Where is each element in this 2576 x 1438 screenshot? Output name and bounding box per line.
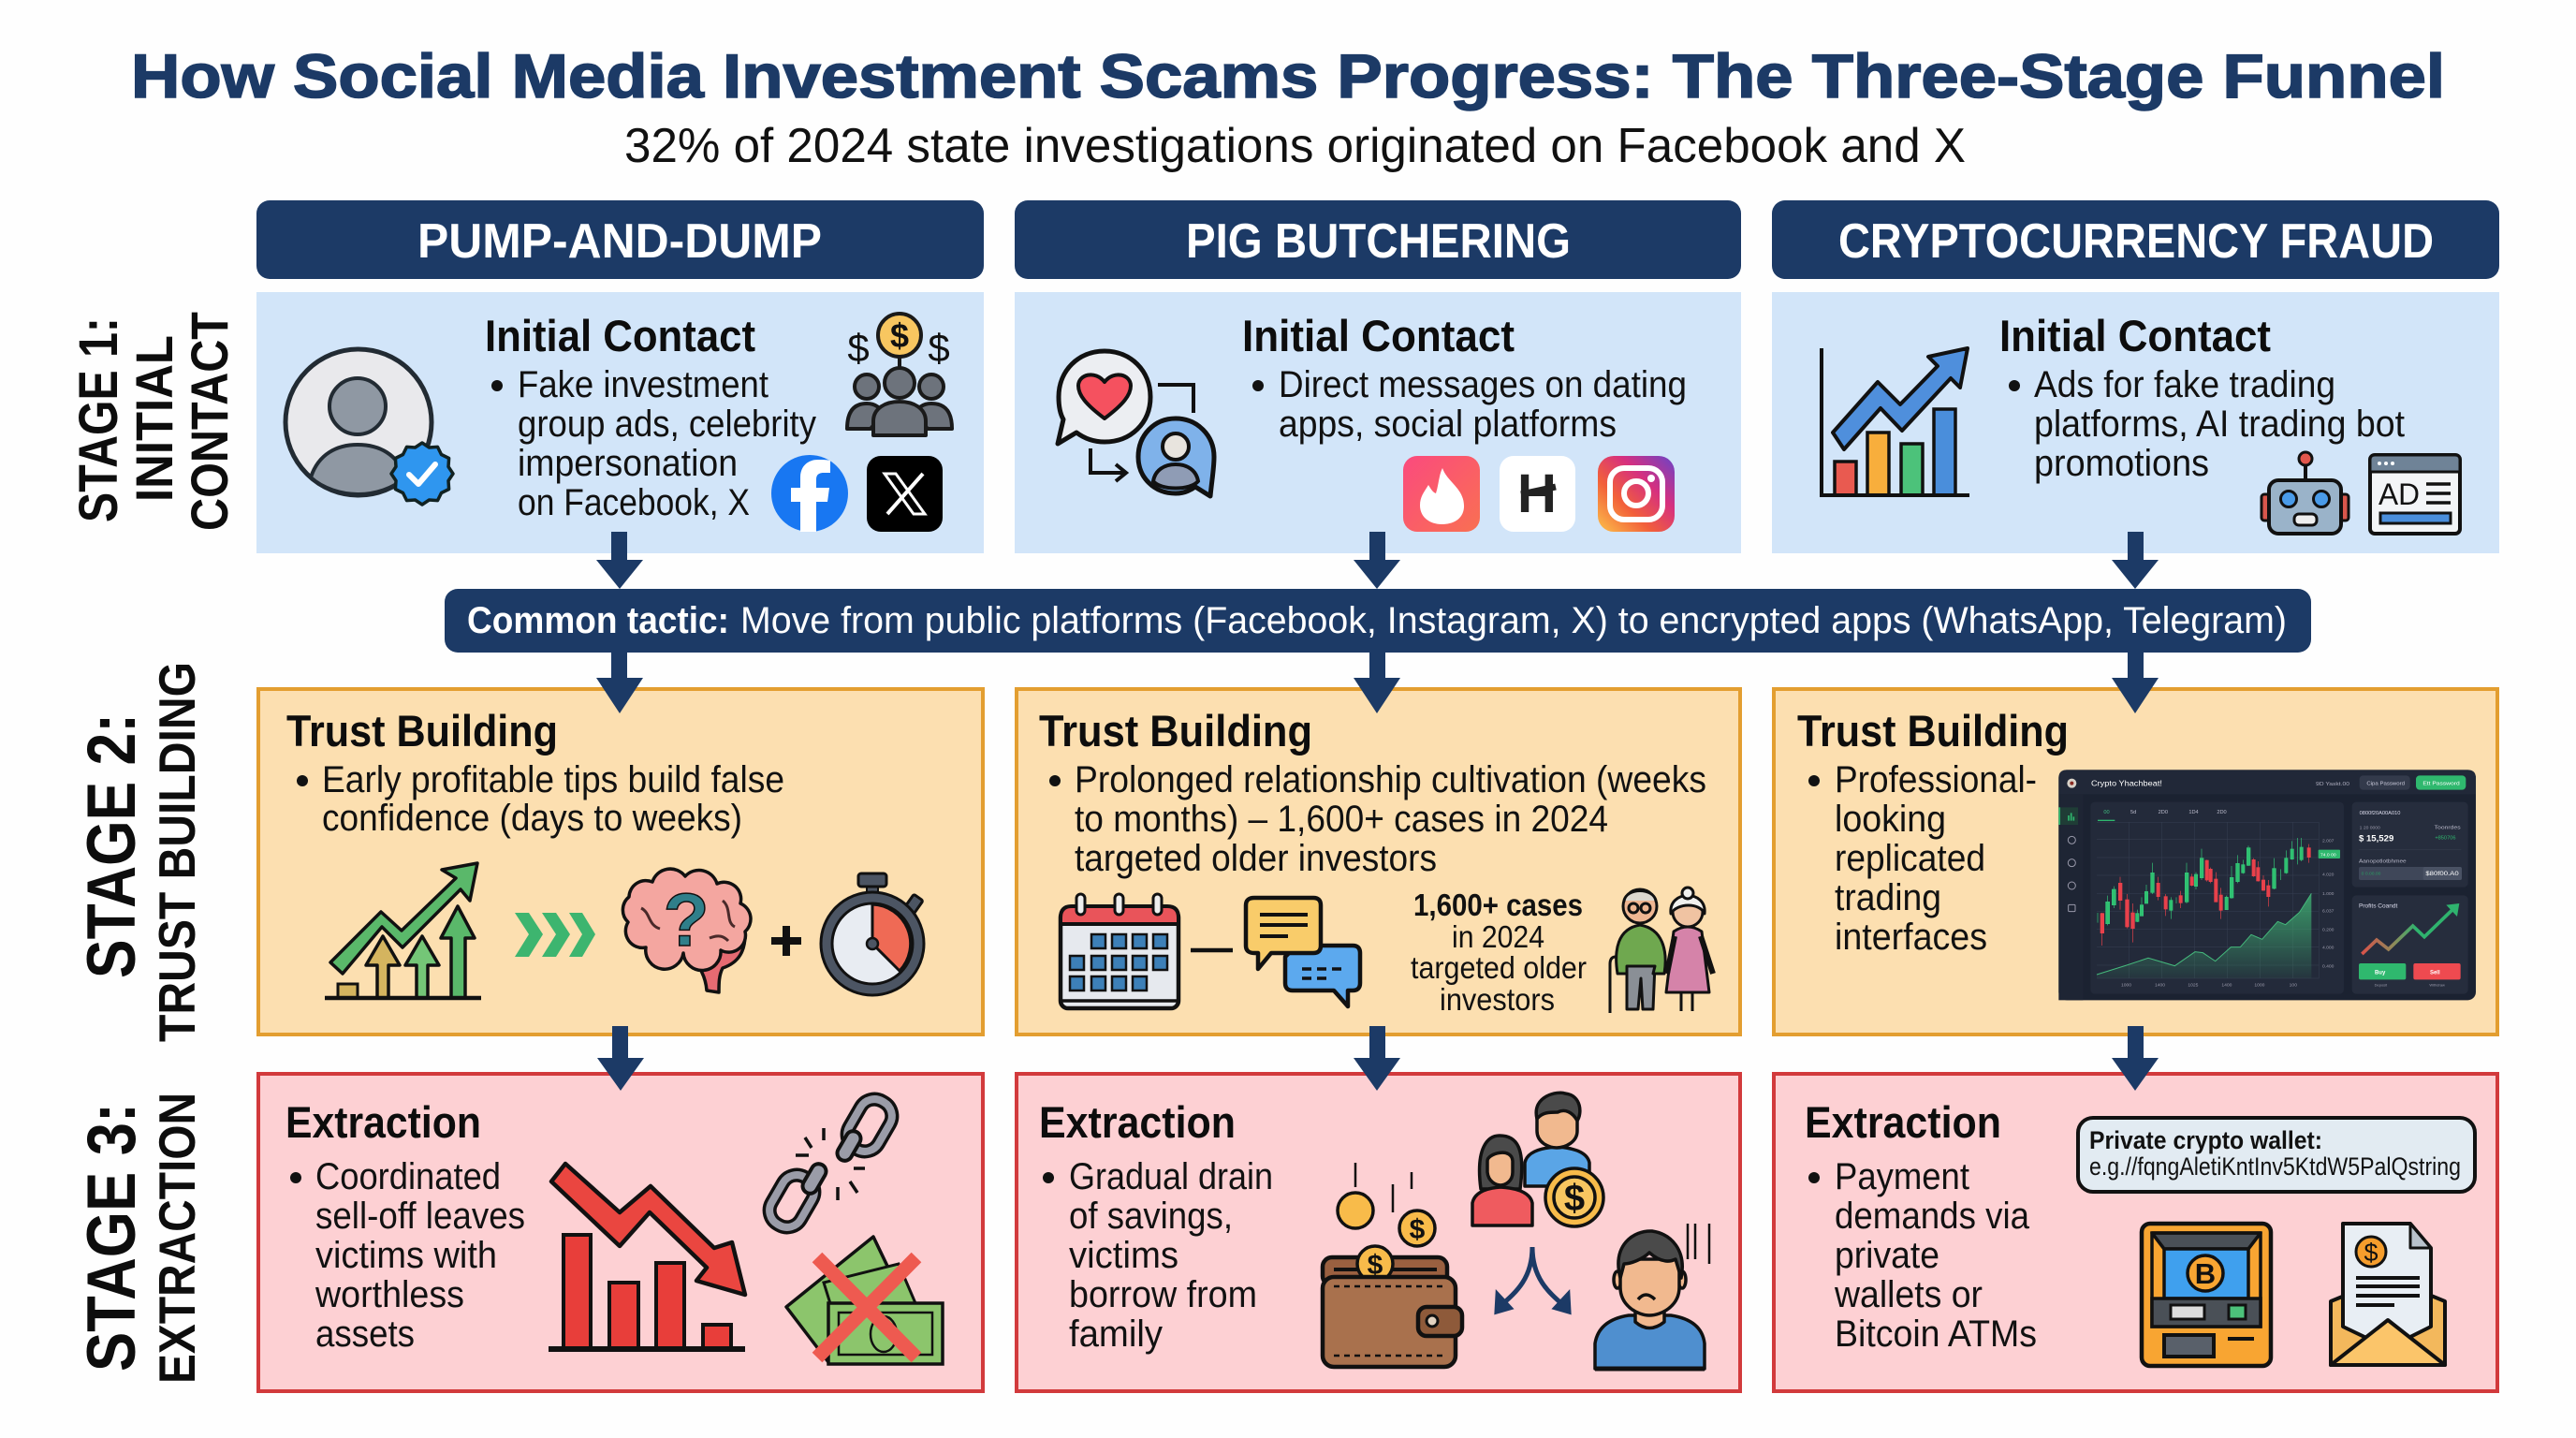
panel: initial contact, pump-and-dump: Initial Contact: [485, 311, 755, 360]
stat text: 1,600+ cases: in 2024: [1452, 919, 1544, 954]
arrow: tactic to stage 2, pump-and-dump: [596, 646, 643, 713]
bullet text: Gradual drain: [1069, 1156, 1273, 1197]
stat text: 1,600+ cases: 1,600+ cases: [1413, 888, 1583, 922]
trading dashboard mockup: 1 20 0000: [2360, 825, 2380, 830]
stage 1 label: [68, 312, 239, 531]
arrow: stage 2 to stage 3, pig butchering: [1354, 1026, 1400, 1091]
trading dashboard mockup: 2D0: [2217, 810, 2227, 815]
panel: extraction, pump-and-dump: Extraction: [285, 1097, 481, 1147]
trading dashboard mockup: 100: [2290, 983, 2297, 989]
callout: private crypto wallet: e.g.//fqngAletiKntInv5KtdW5PalQstring: [2089, 1152, 2461, 1181]
icon: green chevrons: [515, 913, 595, 957]
trading dashboard mockup: 1400: [2155, 983, 2165, 989]
bullet text: Bitcoin ATMs: [1835, 1313, 2037, 1355]
trading dashboard mockup: 00: [2103, 810, 2110, 815]
icon: hinge app: [1500, 456, 1575, 532]
bullet text: [297, 759, 784, 839]
trading dashboard mockup: 0.200: [2322, 927, 2334, 932]
column header: cryptocurrency fraud: [1772, 200, 2499, 279]
icon: bitcoin ATM: [2142, 1224, 2271, 1366]
title: How Social Media Investment Scams Progress: The Three-Stage Funnel: [131, 41, 2445, 110]
bullet text: targeted older investors: [1075, 838, 1437, 879]
trading dashboard mockup: 6.037: [2322, 908, 2334, 914]
column header: cryptocurrency fraud: CRYPTOCURRENCY FRAUD: [1838, 214, 2434, 269]
icon: facebook logo: [771, 455, 848, 532]
common tactic banner: Common tactic:: [467, 600, 729, 641]
icon: X logo: [867, 456, 943, 532]
trading dashboard mockup: 5d: [2130, 810, 2136, 815]
subtitle: 32% of 2024 state investigations originated on Facebook and X: [624, 119, 1966, 173]
panel: trust building, pig butchering: Trust Building: [1039, 706, 1312, 756]
trading dashboard mockup: Sell: [2430, 970, 2440, 976]
bullet text: impersonation: [518, 443, 738, 484]
arrow: stage 1 to tactic, crypto fraud: [2112, 532, 2159, 589]
arrow: tactic to stage 2, crypto fraud: [2112, 646, 2159, 713]
trading dashboard mockup: Ett Password: [2422, 781, 2460, 786]
bullet text: [1252, 364, 1687, 445]
trading dashboard mockup: 0 0.00.00: [2362, 871, 2381, 876]
bullet text: wallets or: [1834, 1274, 1983, 1315]
trading dashboard mockup: Cipa Password: [2366, 781, 2405, 786]
icon: ad window: [2370, 455, 2460, 534]
arrow: stage 1 to tactic, pump-and-dump: [596, 532, 643, 589]
bullet text: victims with: [315, 1235, 497, 1276]
stat text: 1,600+ cases: investors: [1440, 982, 1555, 1017]
bullet text: assets: [315, 1313, 415, 1355]
stage 3 label: [74, 1093, 206, 1384]
bullet text: Direct messages on dating: [1279, 364, 1687, 405]
bullet text: borrow from: [1069, 1274, 1257, 1315]
icon: split arrows: [1497, 1247, 1569, 1312]
icon: worthless money: [786, 1237, 943, 1364]
icon: crashing bar chart: [549, 1164, 745, 1349]
callout: private crypto wallet: [2078, 1118, 2475, 1192]
icon: wallet with falling coins: $: [1368, 1250, 1383, 1281]
trading dashboard mockup: +850706: [2435, 836, 2456, 842]
trading dashboard mockup: 74.0 00: [2320, 852, 2336, 858]
panel: trust building, pump-and-dump: Trust Building: [286, 706, 558, 756]
stat text: 1,600+ cases: targeted older: [1411, 950, 1587, 985]
icon: investment group with coin: [847, 314, 952, 435]
icon: brain with question mark: [622, 869, 751, 992]
bullet text: private: [1835, 1235, 1939, 1276]
icon: chat bubbles: [1246, 898, 1360, 1006]
callout: private crypto wallet: Private crypto wallet:: [2089, 1126, 2322, 1154]
icon: rising gains chart: [325, 863, 481, 998]
trading dashboard mockup: [2058, 770, 2476, 1000]
stage 3 label: EXTRACTION: [148, 1093, 206, 1384]
bullet text: Early profitable tips build false: [322, 759, 784, 800]
trading dashboard mockup: 1000: [2121, 983, 2131, 989]
trading dashboard mockup: Crypto Yhachbeat!: [2091, 779, 2162, 788]
bullet text: worthless: [315, 1274, 464, 1315]
icon: fake verified profile: [285, 349, 453, 505]
trading dashboard mockup: Aanopotlotbhmee: [2359, 859, 2407, 865]
trading dashboard mockup: 2D0: [2159, 810, 2168, 815]
icon: rising bar chart: [1822, 348, 1969, 495]
column header: pump-and-dump: PUMP-AND-DUMP: [417, 214, 822, 269]
stage 3 label: STAGE 3:: [74, 1103, 150, 1372]
bullet text: to months) – 1,600+ cases in 2024: [1075, 799, 1608, 840]
stage 2 label: [74, 662, 206, 1042]
icon: envelope with demand letter: $: [2364, 1239, 2378, 1267]
icon: wallet with falling coins: $: [1410, 1214, 1426, 1245]
trading dashboard mockup: 1000: [2254, 983, 2265, 989]
arrow: stage 1 to tactic, pig butchering: [1354, 532, 1400, 589]
panel: trust building, pump-and-dump: [258, 689, 983, 1034]
trading dashboard mockup: 1D4: [2188, 810, 2199, 815]
bullet text: trading: [1835, 877, 1941, 918]
bullet text: [1808, 1156, 2037, 1355]
bullet text: Professional-: [1835, 759, 2037, 800]
icon: family members and coin: $: [1564, 1178, 1585, 1219]
icon: family members and coin: [1472, 1093, 1603, 1226]
bullet text: sell-off leaves: [315, 1196, 525, 1237]
panel: extraction, pig butchering: Extraction: [1039, 1097, 1236, 1147]
bullet text: family: [1069, 1313, 1163, 1355]
bullet text: of savings,: [1069, 1196, 1233, 1237]
icon: trading bot: [2261, 452, 2349, 534]
bullet text: on Facebook, X: [518, 482, 750, 523]
bullet text: Payment: [1835, 1156, 1969, 1197]
panel: initial contact, pig butchering: [1015, 292, 1741, 553]
panel: extraction, pig butchering: [1017, 1074, 1740, 1391]
trading dashboard mockup: $ 15,529: [2359, 833, 2393, 843]
bullet text: group ads, celebrity: [518, 404, 816, 445]
trading dashboard mockup: 0800f20A00A010: [2360, 811, 2400, 816]
panel: trust building, pig butchering: [1017, 689, 1740, 1034]
trading dashboard mockup: 1.000: [2322, 891, 2334, 897]
bullet text: [2009, 364, 2405, 484]
icon: hinge app: H: [1517, 463, 1557, 524]
trading dashboard mockup: Buy: [2375, 970, 2386, 976]
bullet text: [491, 364, 816, 523]
icon: calendar: [1061, 894, 1178, 1008]
bullet text: Ads for fake trading: [2034, 364, 2335, 405]
trading dashboard mockup: Withdraw: [2429, 983, 2445, 988]
panel: initial contact, pump-and-dump: [256, 292, 984, 553]
bullet text: Prolonged relationship cultivation (weeks: [1075, 759, 1706, 800]
bullet text: Coordinated: [315, 1156, 501, 1197]
bullet text: interfaces: [1835, 917, 1987, 958]
trading dashboard mockup: 1400: [2221, 983, 2232, 989]
icon: investment group with coin: $: [847, 326, 870, 370]
bullet text: [1049, 759, 1706, 879]
trading dashboard mockup: 1025: [2188, 983, 2199, 989]
icon: brain with question mark: ?: [664, 878, 709, 961]
icon: plus sign: [771, 926, 801, 956]
column header: pump-and-dump: [256, 200, 984, 279]
trading dashboard mockup: Toonrdes: [2435, 826, 2461, 831]
arrow: stage 2 to stage 3, crypto fraud: [2112, 1026, 2159, 1091]
bullet text: replicated: [1835, 838, 1985, 879]
arrow: tactic to stage 2, pig butchering: [1354, 646, 1400, 713]
stage 1 label: CONTACT: [180, 312, 239, 531]
icon: envelope with demand letter: [2331, 1224, 2445, 1365]
stage 2 label: TRUST BUILDING: [148, 662, 206, 1042]
panel: extraction, cryptocurrency fraud: Extraction: [1805, 1097, 2001, 1147]
stage 1 label: STAGE 1:: [68, 317, 129, 522]
bullet text: demands via: [1835, 1196, 2030, 1237]
column header: pig butchering: [1015, 200, 1741, 279]
panel: initial contact, pig butchering: Initial Contact: [1242, 311, 1515, 360]
trading dashboard mockup: 0.400: [2322, 963, 2334, 969]
panel: trust building, cryptocurrency fraud: Trust Building: [1797, 706, 2069, 756]
panel: extraction, cryptocurrency fraud: [1774, 1074, 2497, 1391]
icon: instagram app: [1598, 456, 1675, 532]
bullet text: promotions: [2034, 443, 2209, 484]
icon: investment group with coin: $: [890, 316, 909, 355]
connector dash: [1191, 948, 1233, 952]
trading dashboard mockup: Profits Coandt: [2359, 904, 2398, 910]
icon: investment group with coin: $: [928, 326, 950, 370]
column header: pig butchering: PIG BUTCHERING: [1186, 214, 1571, 269]
bullet text: platforms, AI trading bot: [2034, 404, 2405, 445]
stage 1 label: INITIAL: [124, 335, 183, 502]
panel: initial contact, cryptocurrency fraud: Initial Contact: [1999, 311, 2271, 360]
arrow: stage 2 to stage 3, pump-and-dump: [597, 1026, 644, 1091]
bullet text: looking: [1835, 799, 1946, 840]
trading dashboard mockup: $80f00.A0: [2425, 871, 2459, 877]
icon: bitcoin ATM: B: [2195, 1257, 2216, 1290]
panel: initial contact, cryptocurrency fraud: [1772, 292, 2499, 553]
bullet text: apps, social platforms: [1279, 404, 1617, 445]
bullet text: [290, 1156, 525, 1355]
common tactic banner: [445, 589, 2311, 653]
panel: extraction, pump-and-dump: [258, 1074, 983, 1391]
panel: trust building, cryptocurrency fraud: [1774, 689, 2497, 1034]
common tactic banner: Move from public platforms (Facebook, Instagram, X) to encrypted apps (WhatsApp, Telegram): [740, 600, 2287, 641]
trading dashboard mockup: 2.007: [2322, 839, 2334, 844]
bullet text: [1808, 759, 2037, 958]
stage 2 label: STAGE 2:: [74, 713, 150, 978]
icon: distressed victim: [1595, 1224, 1709, 1369]
bullet text: victims: [1069, 1235, 1178, 1276]
trading dashboard mockup: 4.020: [2322, 873, 2334, 878]
icon: broken chain: [764, 1093, 898, 1233]
stat text: 1,600+ cases: [1411, 888, 1587, 1017]
bullet text: confidence (days to weeks): [322, 798, 742, 839]
bullet text: [1043, 1156, 1273, 1355]
icon: ad window: AD: [2378, 477, 2420, 511]
bullet text: Fake investment: [518, 364, 768, 405]
icon: wallet with falling coins: [1323, 1163, 1462, 1367]
icon: stopwatch: [821, 873, 924, 995]
icon: elderly couple: [1610, 888, 1713, 1013]
trading dashboard mockup: Deposit: [2375, 983, 2388, 988]
icon: tinder app: [1403, 456, 1480, 532]
icon: chat heart and profile bubbles: [1058, 351, 1214, 496]
trading dashboard mockup: 4.000: [2322, 946, 2334, 951]
trading dashboard mockup: 9D Yaskt.00: [2316, 782, 2349, 787]
